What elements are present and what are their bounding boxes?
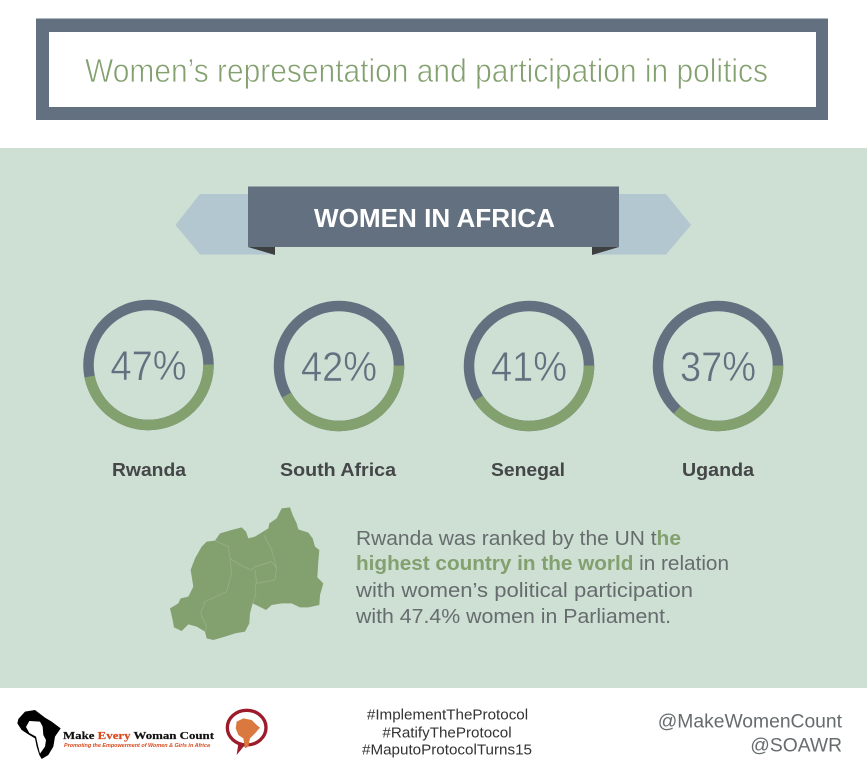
text block: Rwanda fact bbox=[355, 527, 729, 628]
donut: Rwanda 47% bbox=[88, 305, 208, 425]
donut: Uganda 37%: 37% bbox=[680, 343, 756, 390]
title: Women’s representation and participation in politics bbox=[85, 52, 768, 89]
text block: Rwanda fact: Rwanda was ranked by the UN t he bbox=[356, 527, 681, 550]
social handles: @SOAWR bbox=[750, 736, 842, 756]
logo: Make Every Woman Count bbox=[17, 710, 214, 759]
social handles: @MakeWomenCount bbox=[658, 712, 843, 732]
text block: Rwanda fact: with 47.4% women in Parliament. bbox=[355, 605, 671, 628]
banner ribbon bbox=[176, 186, 691, 255]
title frame bbox=[36, 18, 828, 120]
donut: Rwanda 47%: 47% bbox=[110, 342, 186, 389]
social handles bbox=[658, 712, 843, 756]
text block: Rwanda fact: with women’s political participation bbox=[355, 579, 693, 602]
hashtags: #ImplementTheProtocol bbox=[367, 706, 528, 724]
text block: Rwanda fact: highest country in the world in relation bbox=[356, 552, 729, 575]
label: Uganda: Uganda bbox=[682, 459, 755, 480]
logo: Make Every Woman Count: Promoting the Empowerment of Women & Girls in Africa bbox=[64, 743, 210, 749]
panel: women in africa bbox=[0, 148, 867, 688]
label: Senegal: Senegal bbox=[491, 459, 565, 480]
banner heading: WOMEN IN AFRICA bbox=[314, 203, 555, 233]
hashtags: #MaputoProtocolTurns15 bbox=[362, 742, 532, 758]
icon: Africa outline bbox=[17, 710, 61, 759]
donut: Uganda 37% bbox=[658, 306, 778, 426]
donut: South Africa 42% bbox=[279, 306, 399, 426]
hashtags: #RatifyTheProtocol bbox=[382, 724, 512, 742]
donut: Senegal 41%: 41% bbox=[491, 343, 567, 390]
label: South Africa: South Africa bbox=[280, 459, 397, 480]
label: Rwanda: Rwanda bbox=[112, 459, 187, 480]
donut: South Africa 42%: 42% bbox=[301, 343, 377, 390]
footer bbox=[17, 706, 843, 759]
donut: Senegal 41% bbox=[469, 306, 589, 426]
hashtags bbox=[362, 706, 532, 758]
logo: SOAWR bbox=[227, 710, 266, 755]
icon: map of Rwanda bbox=[170, 507, 323, 640]
logo: Make Every Woman Count: Make Every Woman Count bbox=[63, 730, 214, 742]
